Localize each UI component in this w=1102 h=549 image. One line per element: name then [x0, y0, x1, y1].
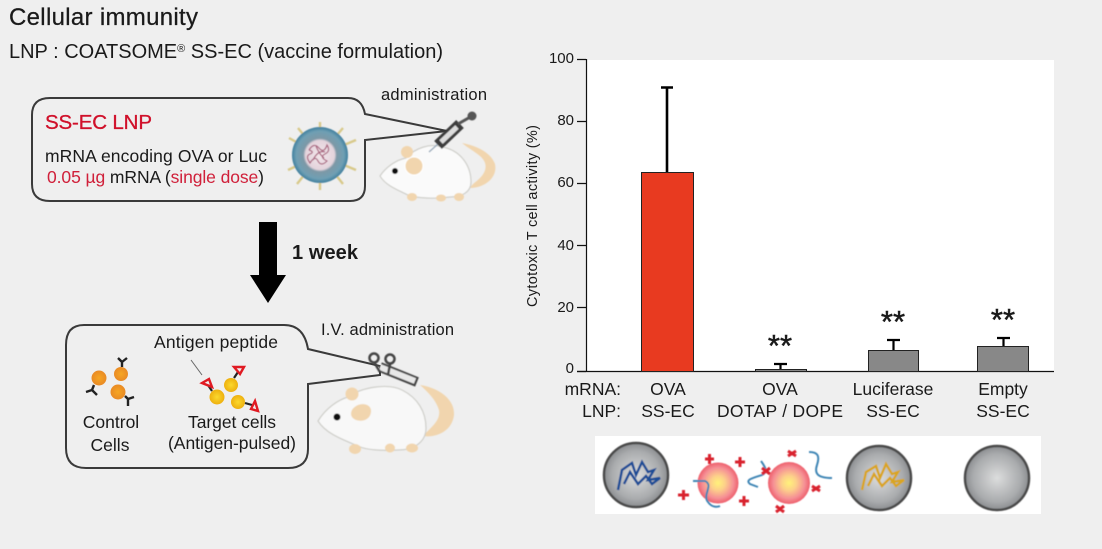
- bar: OVA DOTAP/DOPE: **: [768, 328, 792, 363]
- title: Cellular immunity: [9, 4, 198, 31]
- panel: cells callout: [66, 325, 380, 468]
- bar: Empty SS-EC: **: [991, 302, 1015, 337]
- y axis title: Cytotoxic T cell activity (%): [525, 125, 541, 307]
- text: mRNA encoding: mRNA encoding OVA or Luc: [45, 146, 267, 166]
- illustration: mouse with IV syringe: [318, 354, 454, 454]
- y tick labels: 100: [549, 50, 574, 67]
- y tick labels: 0: [566, 360, 574, 377]
- x axis labels: SS-EC: [641, 401, 695, 421]
- x axis labels: OVA: [762, 379, 798, 399]
- label: administration: administration: [381, 86, 487, 104]
- icon: control cells: [86, 358, 134, 406]
- panel: SS-EC LNP callout: [32, 98, 447, 201]
- icon: DOTAP/DOPE lipoplexes: [678, 451, 832, 512]
- x axis labels: LNP:: [582, 401, 621, 421]
- y tick labels: [549, 50, 574, 377]
- y axis: [577, 59, 1054, 372]
- bar: Luciferase SS-EC: [868, 304, 918, 372]
- icon: target cells: [191, 360, 258, 411]
- x axis labels: mRNA:: [565, 379, 621, 399]
- x axis labels: [565, 379, 1030, 421]
- text: dose: 0.05 µg mRNA (single dose): [47, 167, 264, 187]
- label: antigen peptide: Antigen peptide: [154, 332, 278, 352]
- bar chart: cytotoxic T cell activity: [525, 50, 1054, 421]
- heading: SS-EC LNP: SS-EC LNP: [45, 111, 152, 134]
- label: I.V. administration: I.V. administration: [321, 321, 454, 339]
- x axis labels: SS-EC: [976, 401, 1030, 421]
- icon: empty SS-EC: [965, 446, 1029, 510]
- subtitle: ®: [177, 43, 185, 55]
- icon: SS-EC with luciferase mRNA: [847, 446, 911, 510]
- icon: SS-EC with OVA mRNA: [604, 443, 668, 507]
- y tick labels: 60: [557, 174, 574, 191]
- x axis labels: SS-EC: [866, 401, 920, 421]
- illustration: mouse with syringe: [380, 112, 495, 202]
- y tick labels: 20: [557, 299, 574, 316]
- panel: particle illustrations: [595, 436, 1041, 514]
- label: control cells: Control: [83, 412, 139, 432]
- plot background: [586, 60, 1054, 371]
- x axis labels: OVA: [650, 379, 686, 399]
- bar: OVA DOTAP/DOPE: [756, 328, 806, 372]
- label: 1 week: 1 week: [292, 242, 359, 264]
- bar: Luciferase SS-EC: **: [881, 304, 905, 339]
- arrow: 1 week: [250, 222, 286, 303]
- subtitle: LNP : COATSOME: [9, 41, 177, 63]
- bar: OVA SS-EC: [642, 88, 694, 372]
- label: target cells: Target cells: [188, 412, 276, 432]
- panel: cells callout: Cells: [91, 435, 130, 455]
- x axis labels: DOTAP / DOPE: [717, 401, 843, 421]
- subtitle: SS-EC (vaccine formulation): [185, 41, 443, 63]
- x axis labels: Empty: [978, 379, 1028, 399]
- panel: cells callout: (Antigen-pulsed): [168, 433, 296, 453]
- y tick labels: 80: [557, 112, 574, 129]
- y tick labels: 40: [557, 237, 574, 254]
- bar: Empty SS-EC: [978, 302, 1028, 372]
- icon: lipid nanoparticle: [288, 122, 356, 190]
- x axis labels: Luciferase: [853, 379, 933, 399]
